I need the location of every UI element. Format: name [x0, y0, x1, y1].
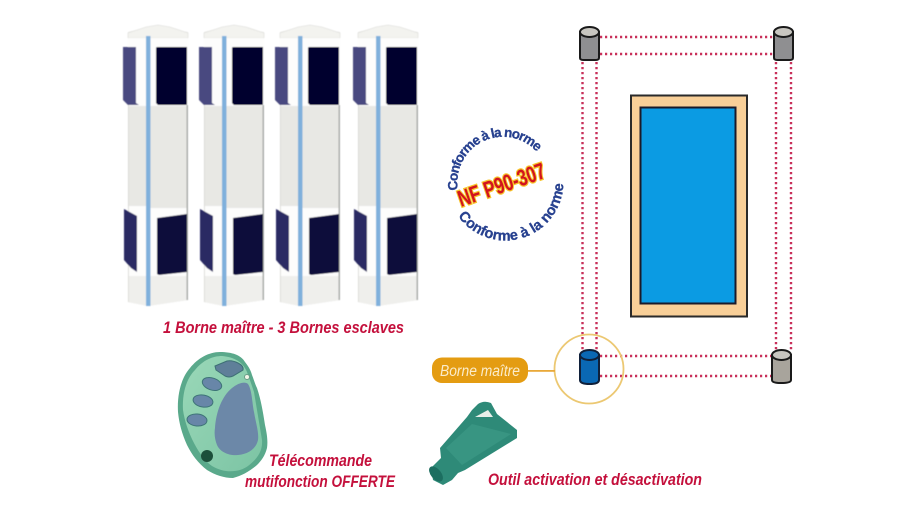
caption: remote: mutifonction OFFERTE	[245, 473, 396, 491]
connector line	[527, 370, 555, 372]
remote body	[178, 352, 267, 478]
grey bollard top left	[580, 27, 599, 60]
caption: tool: Outil activation et désactivation	[488, 471, 702, 489]
remote LED	[244, 374, 250, 380]
caption: bollards: 1 Borne maître - 3 Bornes esclaves	[163, 319, 404, 337]
caption: remote: Télécommande	[269, 452, 372, 470]
tool handle opening	[475, 410, 493, 417]
pool surround	[631, 96, 747, 316]
highlight circle	[554, 334, 624, 404]
stamp arc text top: Conforme à la norme	[448, 128, 540, 190]
remote square button	[215, 361, 243, 377]
pool water	[640, 108, 736, 304]
remote buttons	[187, 375, 223, 427]
bollard 2	[199, 25, 264, 306]
pool perimeter diagram	[432, 27, 793, 404]
product photo: four bollards	[123, 25, 418, 306]
stamp centre label: NF P90-307	[454, 158, 549, 212]
bollard 1	[123, 25, 188, 306]
remote key ring hole	[201, 450, 213, 462]
tool body	[431, 402, 517, 485]
remote keypad	[215, 383, 258, 455]
master bollard	[580, 350, 599, 384]
remote control	[178, 352, 267, 478]
label: master bollard: Borne maître	[440, 363, 520, 380]
bollard 3	[275, 25, 340, 306]
tool face	[446, 424, 511, 465]
tool nozzle	[426, 464, 446, 484]
compliance stamp	[448, 128, 564, 241]
stamp arc text bottom: Conforme à la norme	[460, 184, 564, 241]
label: master bollard	[432, 358, 528, 383]
bollard 4	[353, 25, 418, 306]
grey bollard top right	[774, 27, 793, 60]
caption: remote	[245, 452, 396, 491]
activation tool	[426, 402, 517, 485]
grey bollard bottom right	[772, 350, 791, 383]
remote inner face	[183, 356, 262, 471]
infrared beams	[582, 37, 791, 376]
